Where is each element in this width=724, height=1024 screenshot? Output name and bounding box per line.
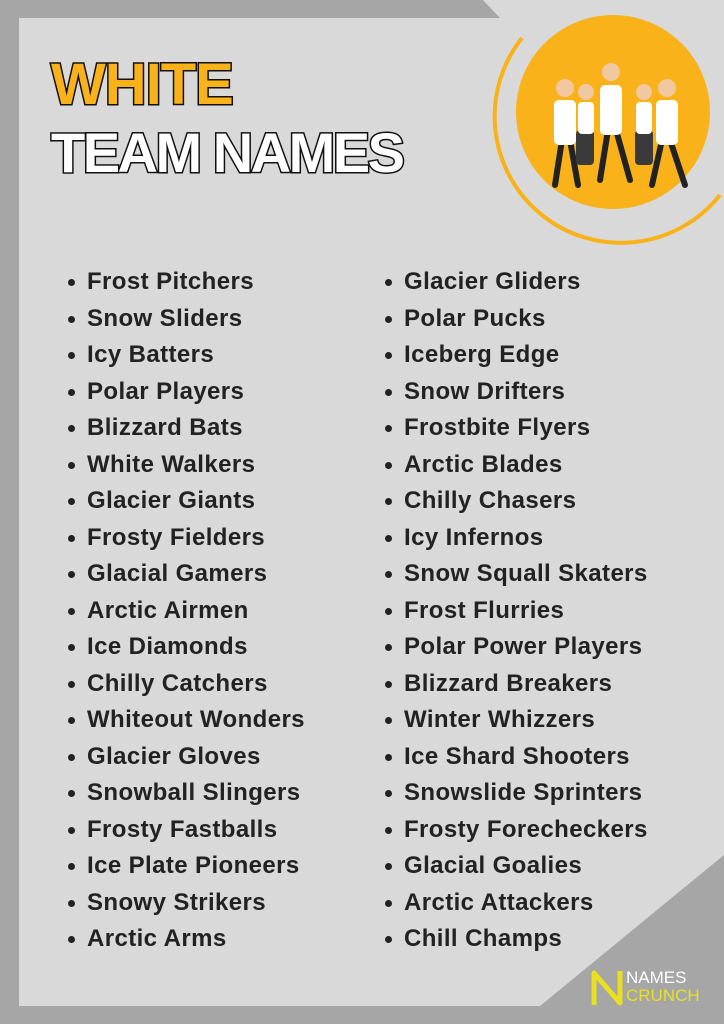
list column 1: Snow Sliders (87, 304, 243, 332)
list column 1: Glacier Giants (87, 487, 255, 514)
list column 1: Frosty Fielders (87, 524, 265, 550)
illustration: team in yellow circle (492, 15, 722, 245)
list column 2: Icy Infernos (404, 524, 544, 550)
title: TEAM NAMES (51, 121, 402, 184)
list column 2: Frosty Forecheckers (404, 816, 648, 842)
list column 2: Frostbite Flyers (404, 414, 590, 441)
list column 1: Arctic Airmen (87, 596, 249, 624)
list column 2: Frost Flurries (404, 596, 564, 624)
list column 1: Chilly Catchers (87, 670, 268, 696)
list column 2: Polar Power Players (404, 633, 642, 660)
list column 2: Ice Shard Shooters (404, 742, 630, 770)
title: WHITE (51, 52, 233, 117)
logo: NAMES (626, 968, 686, 987)
list column 2: Iceberg Edge (404, 341, 560, 368)
list column 2: Arctic Blades (404, 450, 563, 478)
list column 1: Frosty Fastballs (87, 816, 277, 842)
list column 2: Winter Whizzers (404, 706, 595, 733)
list column 2: Snowslide Sprinters (404, 779, 642, 806)
list column 2: Snow Squall Skaters (404, 560, 648, 587)
list column 1: Whiteout Wonders (87, 706, 305, 733)
list column 1: Icy Batters (87, 341, 214, 368)
list column 1: Arctic Arms (87, 925, 227, 952)
logo: CRUNCH (626, 986, 700, 1005)
list column 2: Chill Champs (404, 925, 562, 952)
list column 1: White Walkers (87, 450, 255, 478)
list column 1: Ice Diamonds (87, 633, 248, 660)
list column 1: Frost Pitchers (87, 268, 254, 295)
list column 1 (68, 268, 305, 952)
list column 1: Snowy Strikers (87, 888, 266, 916)
list column 2: Snow Drifters (404, 378, 565, 404)
list column 2: Polar Pucks (404, 304, 546, 332)
list column 1: Glacier Gloves (87, 742, 261, 770)
list column 2: Arctic Attackers (404, 888, 594, 916)
list column 2: Glacier Gliders (404, 268, 581, 295)
list column 2 (385, 268, 648, 952)
list column 2: Blizzard Breakers (404, 670, 612, 696)
list column 2: Glacial Goalies (404, 852, 582, 879)
list column 2: Chilly Chasers (404, 487, 576, 514)
list column 1: Polar Players (87, 378, 244, 404)
logo (592, 968, 700, 1006)
list column 1: Ice Plate Pioneers (87, 852, 300, 879)
list column 1: Blizzard Bats (87, 414, 243, 441)
list column 1: Snowball Slingers (87, 779, 301, 806)
list column 1: Glacial Gamers (87, 560, 267, 587)
title (49, 52, 404, 184)
